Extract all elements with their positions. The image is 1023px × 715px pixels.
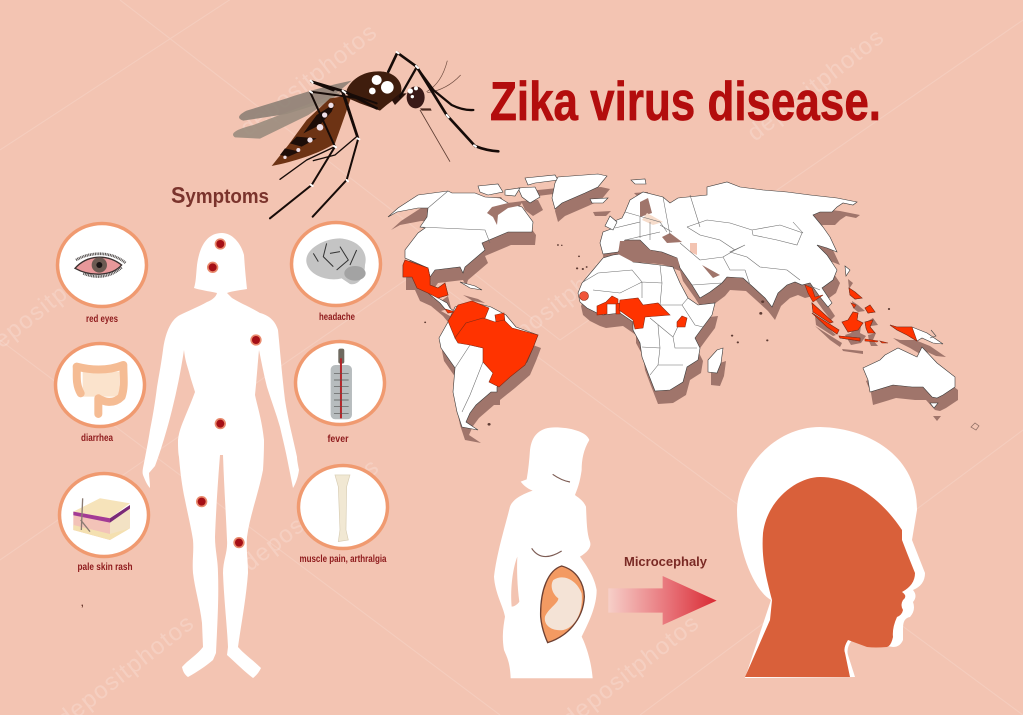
title: Zika virus disease. [490, 70, 881, 132]
body lines [532, 474, 570, 557]
normal head outline [737, 427, 925, 678]
continents [388, 174, 955, 430]
illustration: human body with symptom points [143, 233, 299, 678]
symptom: pale skin rash [60, 474, 148, 573]
silhouette [494, 427, 597, 678]
womb [541, 566, 584, 643]
legs [270, 52, 498, 218]
symptom: headache [292, 222, 380, 323]
icon: eye [75, 254, 126, 277]
label: microcephaly: Microcephaly [624, 554, 708, 569]
small islands: new britain [930, 330, 936, 338]
inland seas [487, 198, 720, 278]
label: fever [328, 434, 349, 445]
watermark: depositphotos [749, 454, 896, 577]
ring [56, 344, 144, 426]
symptom points [196, 238, 262, 548]
watermark: depositphotos [742, 24, 889, 147]
wings [233, 81, 352, 139]
label: red eyes [86, 314, 118, 325]
ring [60, 474, 148, 556]
label: headache [319, 312, 355, 323]
small islands [424, 244, 890, 426]
icon: skin section [73, 498, 130, 540]
icon: intestine [77, 365, 124, 414]
small mark [971, 423, 979, 430]
icon: bone [335, 475, 350, 542]
arrow [608, 576, 717, 625]
icon: thermometer [331, 349, 352, 419]
stray mark: , [81, 598, 84, 608]
illustration: pregnant woman [494, 427, 597, 678]
arm gap [511, 557, 519, 607]
small head [745, 477, 915, 677]
ring [292, 222, 380, 306]
ring [58, 224, 146, 306]
watermark: depositphotos [235, 19, 382, 142]
head [392, 61, 461, 162]
label: diarrhea [81, 433, 113, 444]
symptom: red eyes [58, 224, 146, 325]
symptom: muscle pain [298, 466, 388, 565]
affected areas [403, 260, 917, 387]
map shadow [391, 187, 958, 443]
fetus [545, 577, 582, 630]
country borders [420, 191, 820, 412]
ring [298, 466, 388, 548]
label: muscle pain, arthralgia [300, 554, 387, 565]
illustration: microcephaly head [737, 427, 925, 678]
watermark: depositphotos [487, 240, 634, 363]
abdomen [272, 95, 352, 166]
label: pale skin rash [78, 562, 132, 573]
icon: brain [306, 238, 366, 284]
illustration: mosquito [233, 52, 498, 218]
heading: symptoms: Symptoms [171, 182, 269, 208]
light patches [642, 213, 663, 225]
symptom: diarrhea [56, 344, 144, 444]
watermark: depositphotos [237, 454, 384, 577]
symptom: fever [296, 342, 384, 445]
body silhouette [143, 233, 299, 678]
thorax [347, 71, 401, 111]
map: world distribution [388, 174, 958, 443]
ring [296, 342, 384, 424]
